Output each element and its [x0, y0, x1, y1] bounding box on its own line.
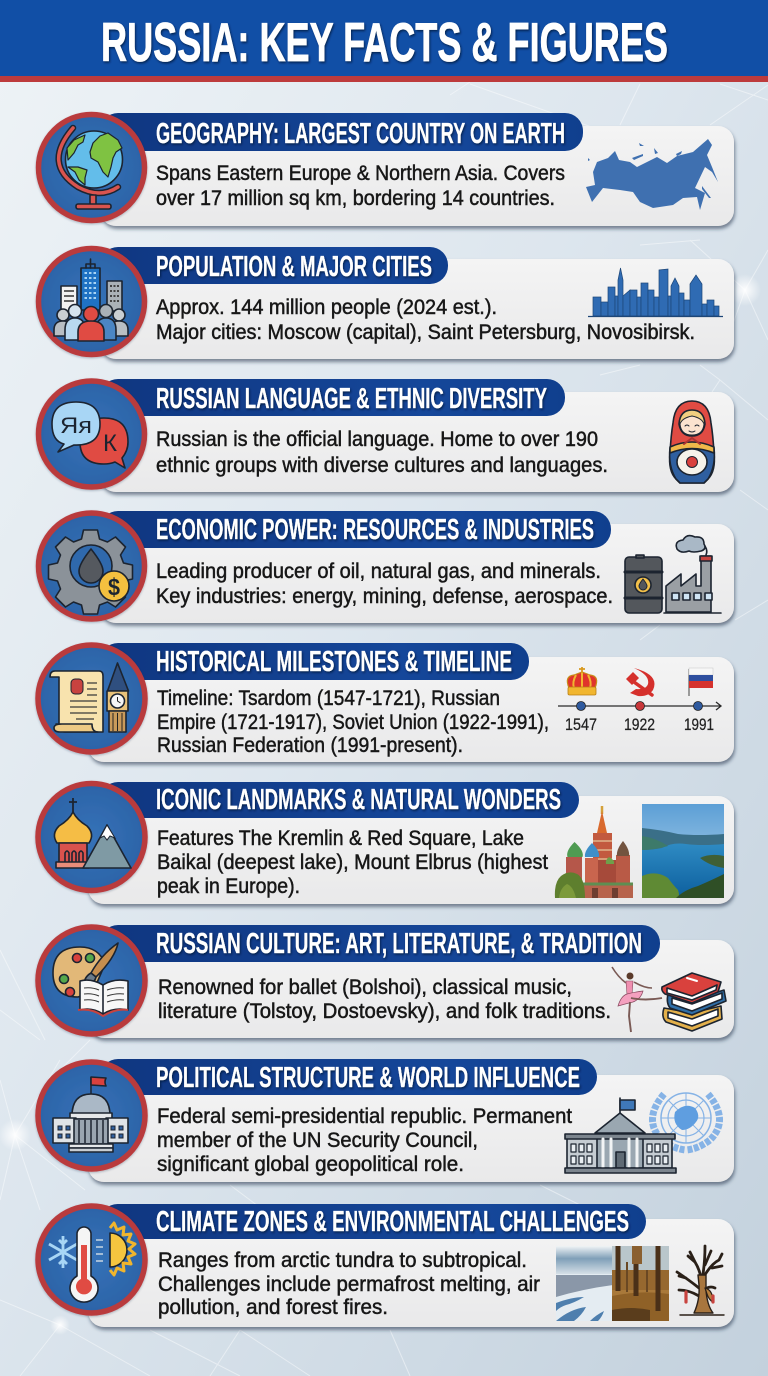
card — [88, 940, 734, 1038]
panel: population — [38, 247, 734, 359]
body text — [156, 161, 565, 210]
image: burnt forest — [612, 1246, 669, 1321]
body text: Empire (1721-1917), Soviet Union (1922-1991), — [157, 710, 549, 734]
body text: Federal semi-presidential republic. Permanent — [157, 1104, 572, 1128]
banner — [100, 247, 448, 284]
banner — [100, 379, 565, 416]
body text — [158, 1248, 540, 1319]
header bar — [0, 0, 768, 82]
icon: crown — [567, 667, 597, 695]
body text — [157, 686, 549, 757]
banner — [100, 113, 583, 151]
icon badge: speech bubbles: Яя — [60, 413, 92, 438]
icon: factory and smoke — [664, 536, 721, 613]
panel: economy — [38, 511, 734, 623]
body text: Leading producer of oil, natural gas, and minerals. — [156, 559, 601, 583]
panel: culture — [38, 925, 734, 1038]
body text — [157, 1104, 572, 1176]
card — [100, 126, 734, 226]
body text: Spans Eastern Europe & Northern Asia. Covers — [156, 161, 565, 185]
banner — [100, 1059, 597, 1095]
panel: landmarks — [38, 782, 734, 904]
icon: un emblem — [652, 1093, 720, 1150]
card — [100, 524, 734, 623]
icon badge: thermometer, snowflake, sun — [38, 1206, 145, 1313]
icon badge: capitol building — [38, 1062, 145, 1169]
timeline — [558, 667, 721, 734]
icon: oil barrel — [625, 555, 662, 613]
image: st basil's cathedral — [555, 806, 633, 898]
card — [88, 796, 734, 904]
icon badge: cathedral and mountain — [38, 784, 145, 890]
body text: significant global geopolitical role. — [157, 1152, 464, 1176]
body text: peak in Europe). — [157, 874, 300, 898]
image: lake baikal — [642, 804, 724, 898]
card — [100, 392, 734, 492]
card — [88, 657, 734, 762]
card — [88, 1075, 734, 1182]
icon badge: gear, oil, coin — [38, 513, 144, 619]
body text: Key industries: energy, mining, defense, aerospace. — [156, 584, 613, 608]
body text: Baikal (deepest lake), Mount Elbrus (highest — [157, 850, 548, 874]
body text: Russian Federation (1991-present). — [157, 733, 463, 757]
body text: ethnic groups with diverse cultures and languages. — [156, 453, 608, 477]
timeline: 1547 — [565, 715, 597, 734]
heading: POPULATION & MAJOR CITIES — [156, 251, 432, 283]
body text: Renowned for ballet (Bolshoi), classical music, — [158, 975, 572, 999]
image: snowy tundra — [556, 1246, 613, 1321]
body text: literature (Tolstoy, Dostoevsky), and folk traditions. — [158, 999, 611, 1023]
body text: Russian is the official language. Home to over 190 — [156, 427, 598, 451]
body text: Challenges include permafrost melting, air — [158, 1272, 540, 1296]
body text: Major cities: Moscow (capital), Saint Petersburg, Novosibirsk. — [156, 320, 695, 344]
heading: HISTORICAL MILESTONES & TIMELINE — [156, 646, 512, 678]
body text: Approx. 144 million people (2024 est.). — [156, 295, 497, 319]
body text: member of the UN Security Council, — [157, 1128, 478, 1152]
icon: book stack — [662, 973, 726, 1031]
body text: pollution, and forest fires. — [158, 1295, 388, 1319]
body text — [157, 826, 548, 898]
icon badge: speech bubbles — [38, 381, 144, 487]
icon: ballerina — [612, 967, 662, 1032]
body text — [156, 295, 695, 344]
icon: dead tree — [677, 1246, 724, 1315]
icon badge: scroll and clock tower — [38, 645, 145, 752]
heading: ICONIC LANDMARKS & NATURAL WONDERS — [156, 784, 561, 816]
icon: hammer and sickle — [626, 668, 654, 696]
body text — [156, 427, 608, 477]
panel: history — [38, 643, 734, 762]
timeline: 1991 — [684, 715, 714, 734]
panel: geography — [38, 113, 734, 226]
body text — [158, 975, 611, 1023]
icon: matryoshka doll — [670, 401, 714, 483]
panel: politics — [38, 1059, 734, 1182]
panel: language — [38, 379, 734, 492]
body text: Features The Kremlin & Red Square, Lake — [157, 826, 524, 850]
heading: RUSSIAN LANGUAGE & ETHNIC DIVERSITY — [156, 383, 547, 415]
icon: government building — [565, 1098, 676, 1173]
timeline: 1922 — [624, 715, 655, 734]
banner — [100, 1204, 646, 1239]
banner — [100, 925, 660, 962]
panel: climate — [38, 1204, 734, 1327]
icon badge: globe — [38, 114, 144, 220]
body text: Ranges from arctic tundra to subtropical. — [158, 1248, 527, 1272]
body text: Timeline: Tsardom (1547-1721), Russian — [157, 686, 500, 710]
card — [88, 1219, 734, 1327]
icon badge: city and people — [38, 248, 144, 354]
icon badge: speech bubbles: К — [103, 430, 117, 457]
icon: russian flag — [689, 668, 713, 696]
banner — [100, 782, 579, 818]
icon badge: gear, oil, coin: $ — [108, 574, 121, 601]
body text — [156, 559, 613, 608]
card — [100, 259, 734, 359]
icon: russia map — [586, 139, 718, 210]
icon: skyline — [588, 268, 723, 316]
body text: over 17 million sq km, bordering 14 countries. — [156, 186, 555, 210]
icon badge: palette and book — [38, 927, 145, 1034]
banner — [100, 511, 611, 548]
banner — [100, 643, 529, 680]
